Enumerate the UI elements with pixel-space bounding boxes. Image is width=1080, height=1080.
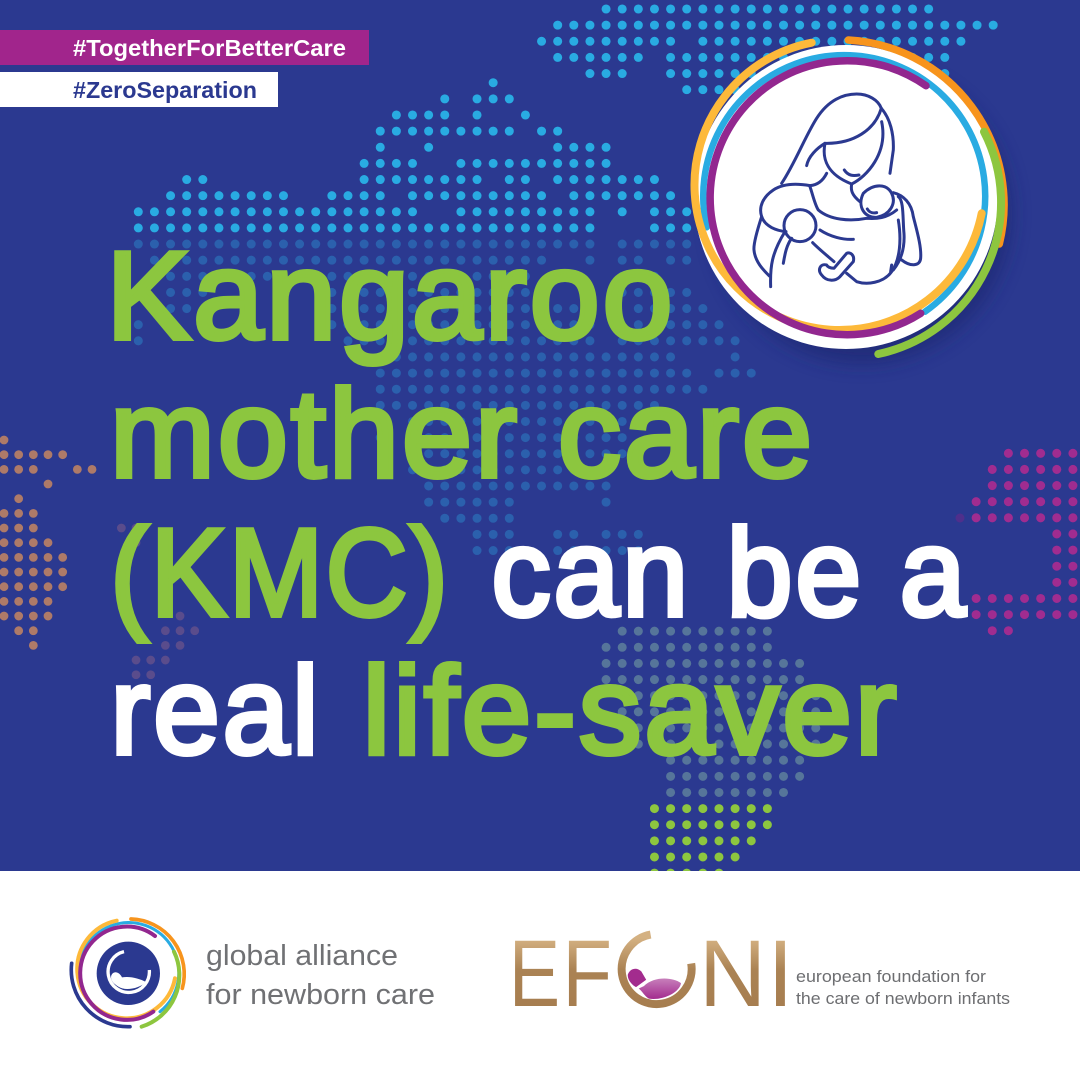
headline line 1: Kangaroo	[106, 228, 676, 366]
hashtag bar: TogetherForBetterCare: #TogetherForBetterCare	[73, 35, 346, 61]
EFCNI text line 1: european foundation for	[796, 967, 986, 986]
dots: brown landmass	[4, 440, 92, 645]
badge: mother and babies in coloured rings	[694, 40, 1012, 364]
headline line 4 green: life-saver	[362, 642, 900, 780]
dot: faded magenta	[956, 514, 964, 522]
dotted world map	[4, 9, 1073, 873]
letter E: E	[509, 921, 560, 1027]
headline line 3 white: can be a	[492, 504, 968, 642]
headline line 3 green: (KMC)	[110, 504, 450, 642]
icon: mother holding two babies	[754, 94, 921, 287]
hashtag bar: ZeroSeparation	[0, 72, 278, 107]
logo text line 2: for newborn care	[206, 979, 435, 1011]
dots: grey landmass	[606, 631, 816, 792]
dots: green landmass	[654, 809, 768, 873]
letter I: I	[767, 921, 794, 1027]
logo text line 1: global alliance	[206, 940, 398, 972]
icon: coloured rings with baby	[71, 919, 184, 1027]
headline line 4 white: real	[110, 642, 322, 780]
logo: EFCNI	[509, 921, 1010, 1027]
dots: top right landmass	[542, 9, 993, 90]
dots: magenta landmass	[976, 453, 1073, 631]
dots: dim blue landmass	[138, 244, 751, 551]
icon: baby in cradle	[628, 969, 681, 999]
letter C drawn as cradle arc	[622, 935, 692, 1004]
headline	[106, 228, 968, 780]
EFCNI text line 2: the care of newborn infants	[796, 989, 1010, 1008]
dots: bright blue landmass	[138, 83, 687, 228]
headline line 2: mother care	[110, 366, 815, 504]
letter F: F	[562, 921, 612, 1027]
hashtag bar: TogetherForBetterCare	[0, 30, 369, 65]
hashtag bar: ZeroSeparation: #ZeroSeparation	[73, 77, 257, 103]
footer panel	[0, 871, 1080, 1080]
dots: faint purple landmass	[121, 528, 195, 675]
letter N: N	[699, 921, 766, 1027]
logo: global alliance for newborn care	[71, 919, 435, 1027]
